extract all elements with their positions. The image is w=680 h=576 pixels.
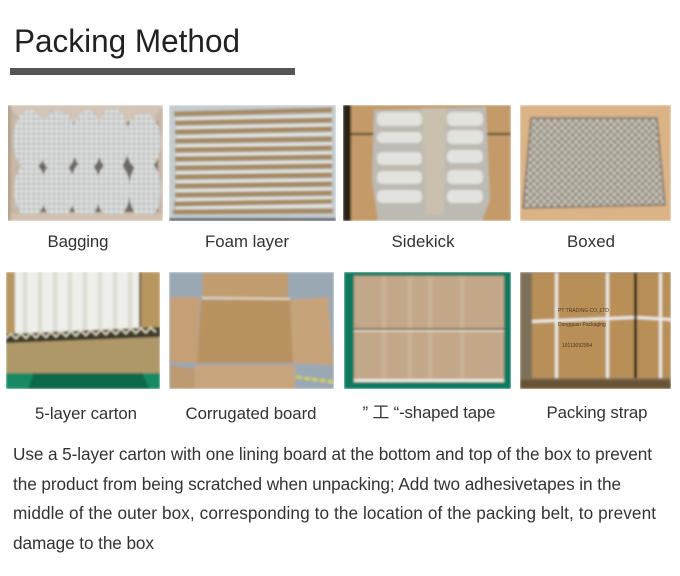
title underline bar: [10, 68, 295, 75]
description text: Use a 5-layer carton with one lining board at the bottom and top of the box to prevent: [13, 444, 652, 464]
label: corrugated board: Corrugated board: [186, 404, 316, 423]
description text: the product from being scratched when unpacking; Add two adhesivetapes in the: [13, 474, 621, 494]
photo: sidekick air cushion: [343, 105, 511, 221]
carton print: Dongguan Packaging: [558, 322, 606, 328]
photo: boxed bubble panel: [520, 105, 671, 221]
description text: [13, 444, 656, 553]
carton print: 19113092954: [562, 343, 592, 349]
label: sidekick: Sidekick: [392, 232, 455, 251]
photo: packing strap: [520, 272, 671, 389]
photo: corrugated board open box: [169, 272, 334, 389]
label: packing strap: Packing strap: [546, 403, 648, 422]
label: I-shaped tape: ” 工 “-shaped tape: [362, 403, 496, 422]
photo: tape on box: [344, 272, 511, 389]
label: 5-layer carton: 5-layer carton: [35, 404, 137, 423]
photo: foam layer: [169, 105, 336, 221]
label: boxed: Boxed: [567, 232, 615, 251]
title: Packing Method: [14, 23, 240, 59]
carton print: PT TRADING CO.,LTD: [558, 308, 609, 314]
description text: middle of the outer box, corresponding to the location of the packing belt, to prevent: [13, 503, 656, 523]
photo: bagging: [8, 105, 163, 221]
label: bagging: Bagging: [48, 232, 108, 251]
description text: damage to the box: [13, 533, 154, 553]
label: foam layer: Foam layer: [205, 232, 289, 251]
photo: 5-layer carton: [6, 272, 160, 389]
carton print: [558, 308, 609, 349]
